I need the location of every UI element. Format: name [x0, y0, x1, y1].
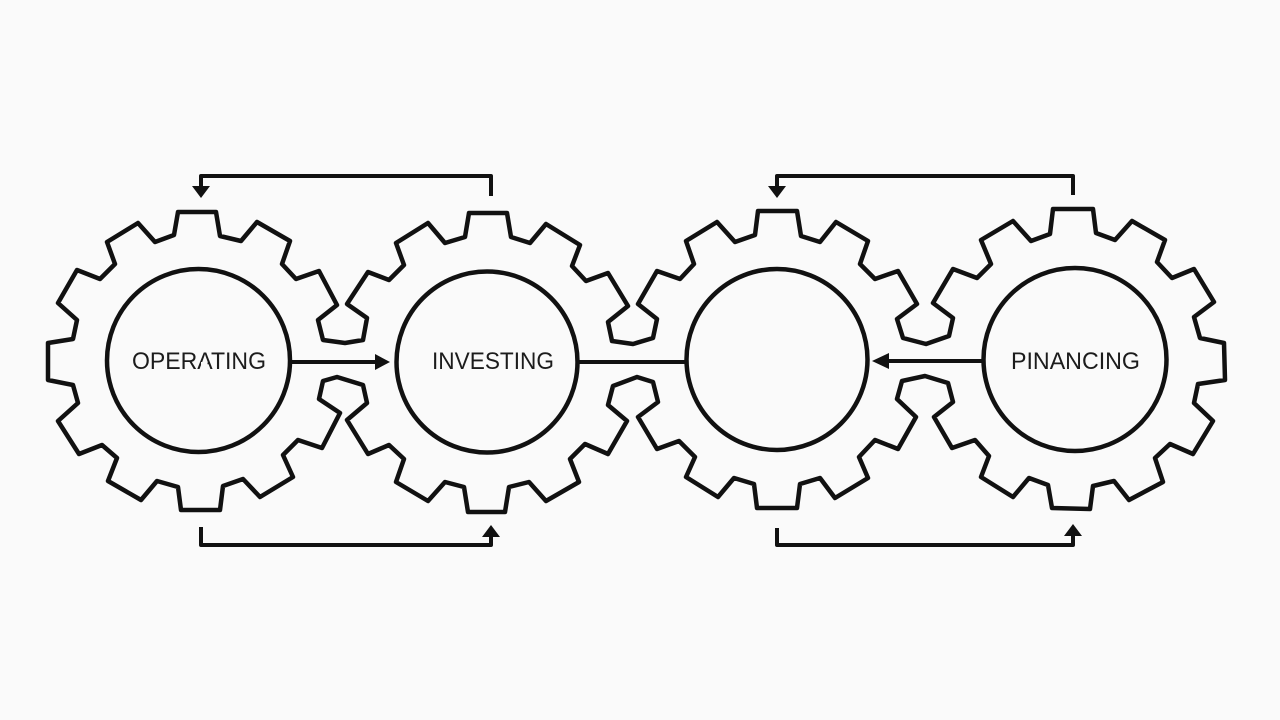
arrow: operating to investing (bottom left) — [201, 525, 500, 545]
gear 1: operating: OPERATING — [132, 348, 266, 375]
gear 3: empty hub — [686, 269, 868, 450]
interlocked gear chain outline — [48, 209, 1225, 512]
gear 4: financing — [984, 268, 1166, 451]
gear 2: investing: INVESTING — [432, 348, 554, 375]
arrow: financing back to middle gear (top right) — [768, 176, 1073, 198]
gear 1: operating — [107, 269, 290, 452]
connector: investing to middle gear — [578, 360, 686, 364]
arrow: operating to investing — [291, 354, 390, 370]
gear 4: financing: PINANCING — [1011, 348, 1140, 375]
gear 2: investing — [396, 272, 578, 452]
arrow: financing to middle gear — [872, 353, 982, 369]
arrow: investing back to operating (top left) — [192, 176, 491, 198]
arrow: middle gear to financing (bottom right) — [777, 524, 1082, 545]
